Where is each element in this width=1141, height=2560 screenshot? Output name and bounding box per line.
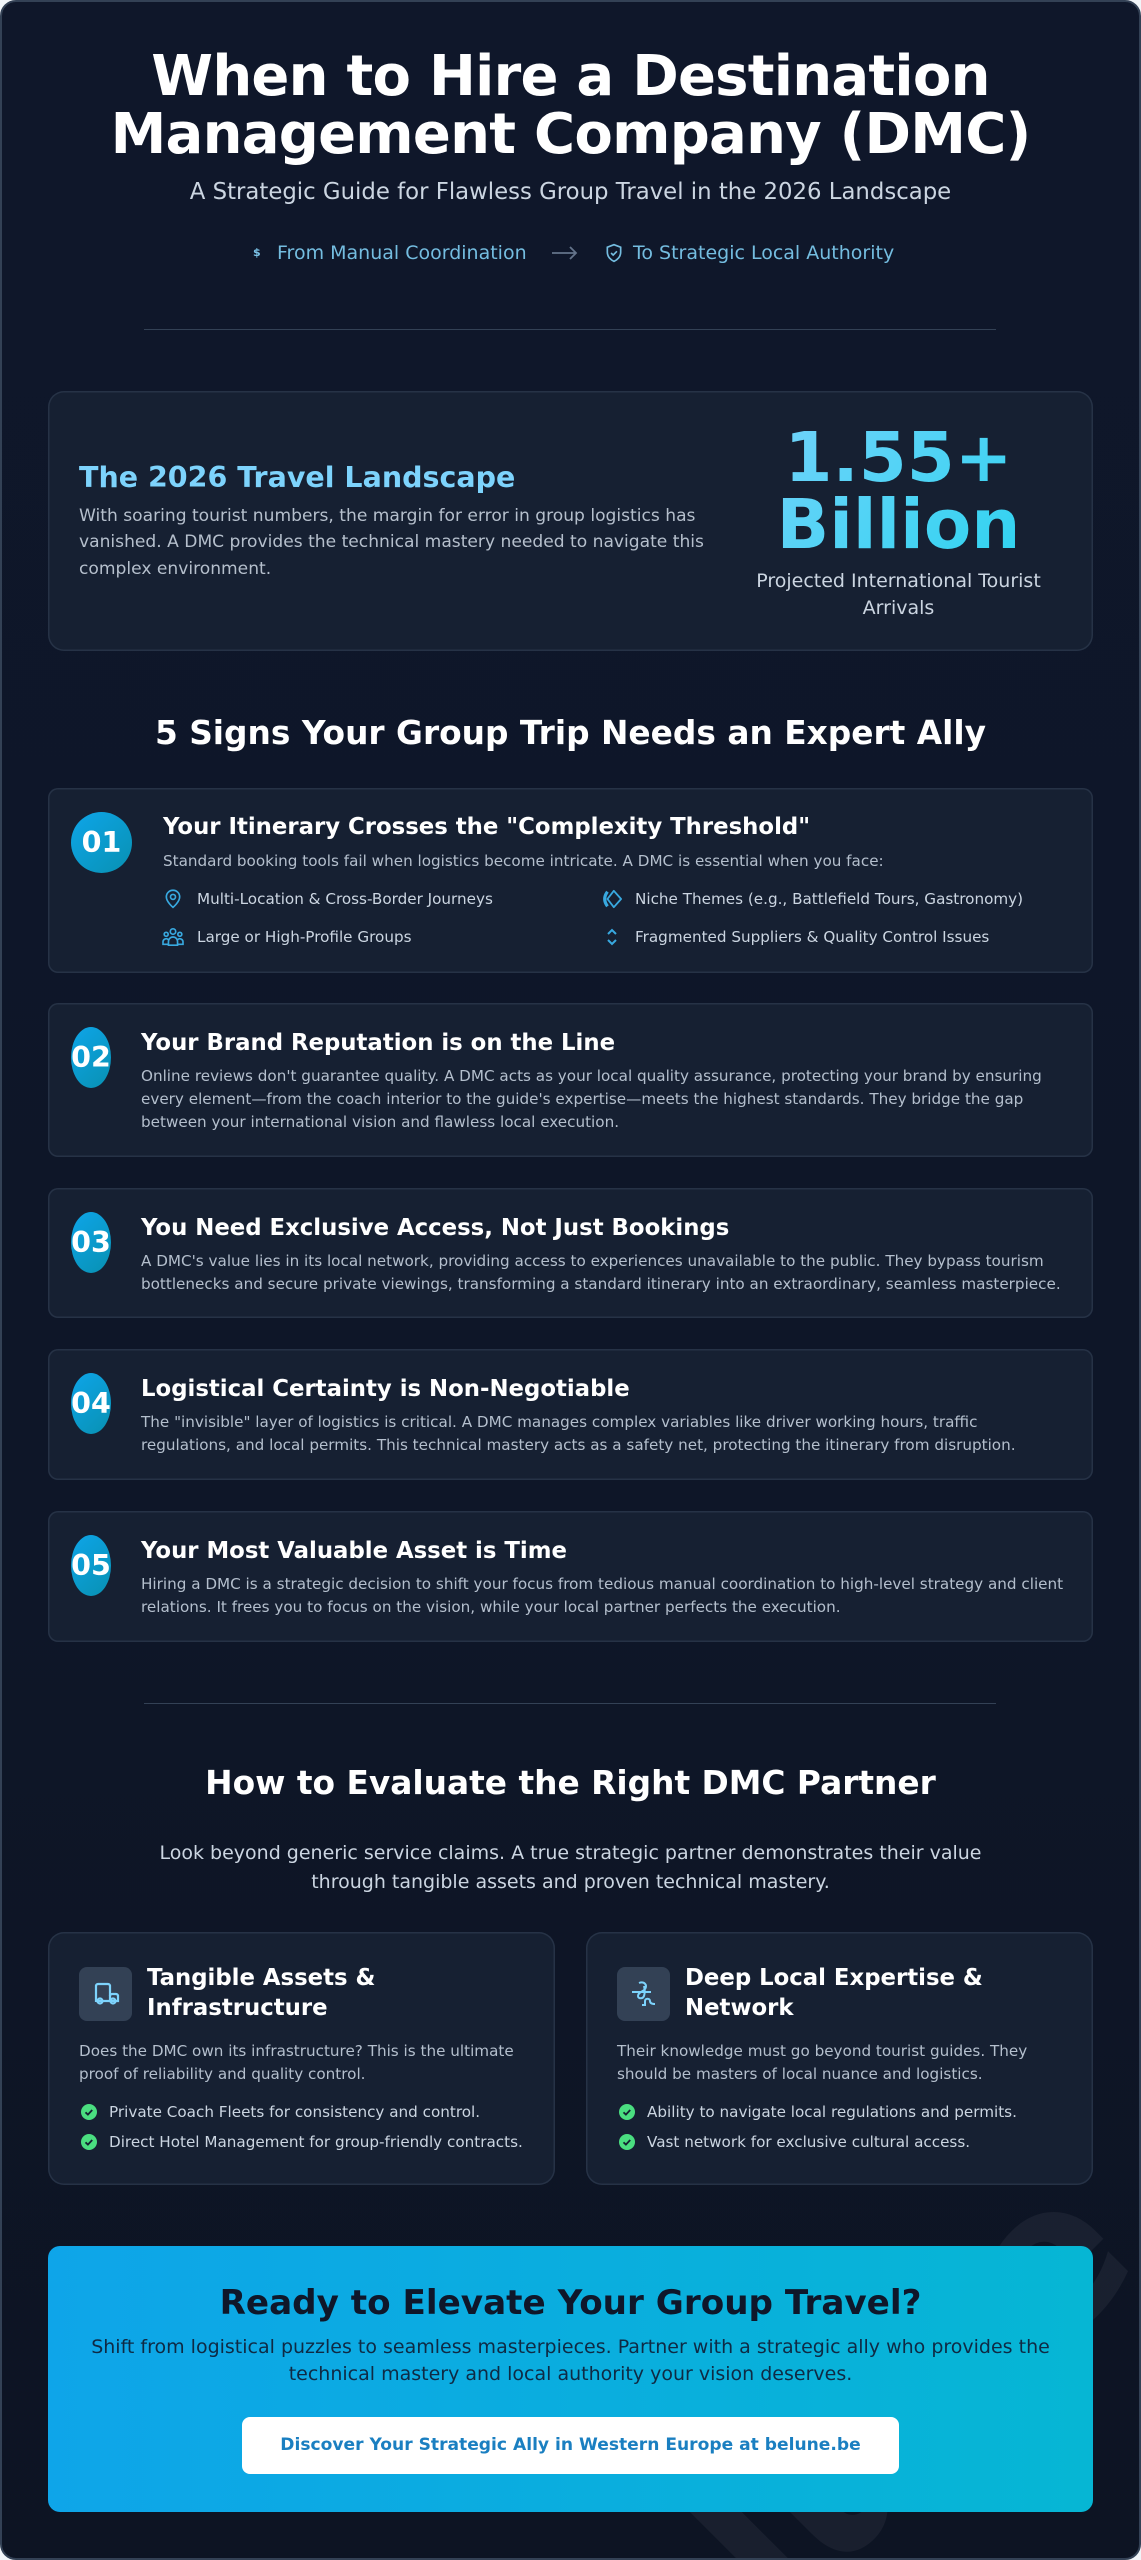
section heading: evaluate: How to Evaluate the Right DMC Partner [205,1764,936,1802]
sign text: relations. It frees you to focus on the vision, while your local partner perfects the execution. [141,1598,841,1616]
panel: 2026 travel landscape [48,391,1093,651]
stat caption: Arrivals [863,597,934,619]
section intro text [160,1842,982,1892]
number badge: 05 [71,1549,111,1582]
panel: local expertise [586,1932,1093,2185]
number badge [71,1373,111,1434]
big stat: Billion [777,484,1020,564]
number badge: 04 [71,1387,111,1420]
panel heading [685,1965,983,2021]
panel heading: Network [685,1995,794,2021]
item: niche themes: Niche Themes (e.g., Battlefield Tours, Gastronomy) [635,890,1023,908]
stat caption: Projected International Tourist [756,570,1041,592]
panel text [79,2042,514,2082]
icon: chevrons [607,928,617,946]
number badge [71,1535,111,1596]
icon: tag [603,890,622,908]
number badge [71,1027,111,1088]
panel text: With soaring tourist numbers, the margin for error in group logistics has [79,506,695,526]
section intro text: through tangible assets and proven technical mastery. [311,1870,830,1892]
sign 02 card [48,1003,1093,1157]
cta button: Discover Your Strategic Ally in Western Europe at belune.be [280,2435,861,2455]
sign heading: Your Itinerary Crosses the "Complexity Threshold" [163,814,810,840]
panel text [616,2042,1027,2082]
panel text: vanished. A DMC provides the technical mastery needed to navigate this [79,532,704,552]
icon: coach [79,1967,132,2021]
from label: From Manual Coordination [277,242,527,264]
panel text: Does the DMC own its infrastructure? This is the ultimate [79,2042,514,2060]
sign text: bottlenecks and secure private viewings, transforming a standard itinerary into an extraordinary, seamless masterpiece. [141,1274,1061,1292]
item: fragmented suppliers: Fragmented Suppliers & Quality Control Issues [635,928,989,946]
list item: Direct Hotel Management for group-friendly contracts. [109,2133,523,2151]
to label: To Strategic Local Authority [633,242,894,264]
panel heading: Infrastructure [147,1995,328,2021]
icon: dollar: $ [253,246,261,259]
number badge: 01 [82,826,121,859]
stat caption [756,570,1041,619]
sign text [140,1412,1016,1454]
sign 01 card [48,788,1093,973]
item: large groups: Large or High-Profile Groups [197,928,412,946]
icon: check [619,2104,635,2120]
sign text: Online reviews don't guarantee quality. A DMC acts as your local quality assurance, protecting your brand by ensuring [141,1066,1042,1084]
icon: check [619,2134,635,2150]
sign text: A DMC's value lies in its local network, providing access to experiences unavailable to the public. They bypass tourism [141,1252,1044,1270]
icon: route [617,1967,670,2021]
title: Management Company (DMC) [111,102,1030,167]
sign text: between your international vision and flawless local execution. [141,1112,619,1130]
icon: location pin [166,889,180,908]
panel text: Their knowledge must go beyond tourist guides. They [617,2042,1027,2060]
icon: check [81,2104,97,2120]
list item: Private Coach Fleets for consistency and control. [109,2103,480,2121]
number badge [71,812,132,873]
title: When to Hire a Destination [151,44,990,109]
panel text: complex environment. [79,559,271,579]
sign text: Standard booking tools fail when logistics become intricate. A DMC is essential when you face: [163,852,884,870]
cta button [242,2417,899,2474]
sign heading: Logistical Certainty is Non-Negotiable [141,1376,630,1402]
subtitle: A Strategic Guide for Flawless Group Travel in the 2026 Landscape [190,179,951,205]
sign heading: Your Brand Reputation is on the Line [141,1030,615,1056]
sign heading: You Need Exclusive Access, Not Just Bookings [141,1214,729,1240]
panel heading: Deep Local Expertise & [685,1965,983,1991]
cta heading: Ready to Elevate Your Group Travel? [220,2283,921,2323]
transition strip: manual to strategic [253,242,894,264]
cta text: Shift from logistical puzzles to seamless masterpieces. Partner with a strategic ally who provides the [91,2336,1050,2358]
sign text [141,1066,1042,1130]
sign text: Hiring a DMC is a strategic decision to shift your focus from tedious manual coordination to high-level strategy and client [141,1574,1063,1592]
icon: shield check [606,244,622,262]
list item: Vast network for exclusive cultural access. [647,2133,970,2151]
panel heading: The 2026 Travel Landscape [79,460,515,494]
panel text [79,506,704,579]
item: multi-location: Multi-Location & Cross-Border Journeys [197,890,493,908]
number badge [71,1212,111,1273]
arrow [552,246,578,260]
panel text: should be masters of local nuance and logistics. [617,2064,983,2082]
sign 03 card [48,1188,1093,1318]
sign text [141,1574,1063,1616]
title [111,44,1030,167]
number badge: 03 [71,1226,111,1259]
big stat: 1.55+ [784,418,1013,498]
sign text: The "invisible" layer of logistics is critical. A DMC manages complex variables like driver working hours, traffic [141,1412,977,1430]
number badge: 02 [71,1041,111,1074]
cta text [91,2336,1050,2385]
sign text: every element—from the coach interior to the guide's expertise—meets the highest standards. They bridge the gap [141,1090,1023,1108]
sign heading: Your Most Valuable Asset is Time [141,1538,567,1564]
section heading: 5 signs: 5 Signs Your Group Trip Needs an Expert Ally [155,714,986,752]
panel text: proof of reliability and quality control. [79,2064,366,2082]
panel heading: Tangible Assets & [147,1965,375,1991]
sign 04 card [48,1349,1093,1480]
cta text: technical mastery and local authority your vision deserves. [289,2363,852,2385]
big stat [698,424,1098,558]
panel heading [147,1965,375,2021]
list item: Ability to navigate local regulations and permits. [647,2103,1017,2121]
call to action panel [48,2246,1093,2512]
sign text [141,1252,1061,1292]
sign text: regulations, and local permits. This technical mastery acts as a safety net, protecting the itinerary from disruption. [141,1436,1016,1454]
panel: tangible assets [48,1932,555,2185]
icon: people group [162,928,184,946]
section intro text: Look beyond generic service claims. A true strategic partner demonstrates their value [160,1842,982,1864]
icon: check [81,2134,97,2150]
sign 05 card [48,1511,1093,1642]
